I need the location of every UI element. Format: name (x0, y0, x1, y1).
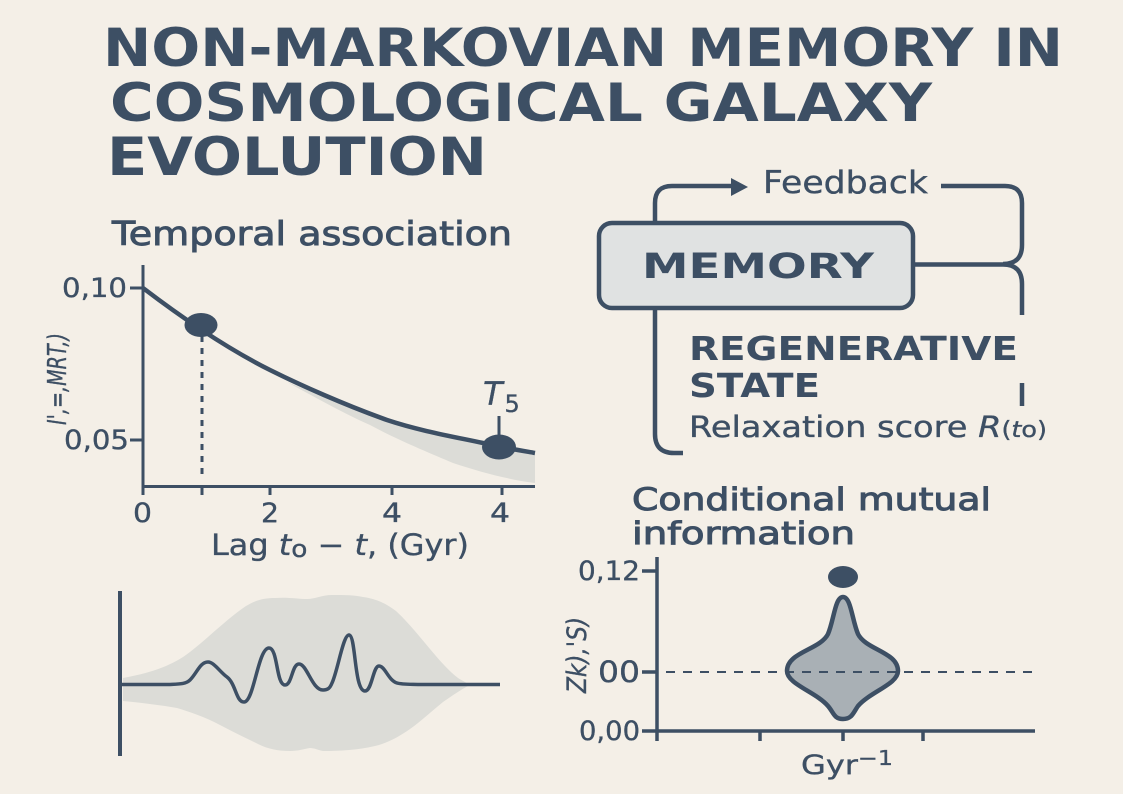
x axis label: t, (Gyr) (355, 528, 460, 562)
feedback loop connectors (655, 186, 1022, 453)
memory box (599, 223, 913, 308)
chart: temporal association line chart: 4 (490, 498, 510, 529)
diagram: memory feedback (599, 165, 1047, 453)
chart: signal with envelope (120, 591, 500, 756)
dashed marker line (200, 336, 204, 480)
x axis label: − (307, 528, 355, 562)
arrowhead (731, 178, 748, 196)
y axis label: Zk),'S) (562, 617, 593, 694)
regenerative state label (689, 329, 1018, 405)
chart: temporal association line chart: 2 (261, 498, 279, 529)
heading: conditional mutual information (632, 482, 991, 552)
chart: conditional mutual information violin (562, 556, 1037, 781)
title (103, 18, 1063, 188)
regenerative state label: STATE (689, 366, 820, 405)
regenerative state label: REGENERATIVE (689, 329, 1018, 368)
T5 data point (482, 434, 516, 460)
x axis label: Lag t (211, 528, 290, 562)
x axis label: −1 (858, 746, 893, 770)
title: NON-MARKOVIAN MEMORY IN (103, 18, 1063, 79)
heading: conditional mutual information: information (632, 516, 855, 552)
feedback label: Feedback (763, 165, 928, 201)
axes (130, 265, 535, 495)
outlier point (828, 566, 858, 588)
chart: temporal association line chart (43, 265, 535, 563)
chart: conditional mutual information violin: 00 (598, 655, 640, 689)
title: COSMOLOGICAL GALAXY (110, 73, 933, 134)
decay curve (143, 288, 535, 453)
dashed reference line (666, 671, 1037, 673)
relaxation score label: Relaxation score R(to) (689, 410, 1047, 444)
y axis label: I',=,MRT,) (43, 333, 73, 425)
T5 marker (498, 416, 500, 440)
heading: conditional mutual information: Conditional mutual (632, 482, 991, 518)
vertical axis (118, 591, 122, 756)
waveform (120, 635, 500, 702)
violin (787, 597, 898, 719)
title: EVOLUTION (107, 127, 487, 188)
memory label: MEMORY (642, 247, 875, 287)
x axis label: o (291, 535, 307, 563)
shaded band under curve (287, 382, 535, 483)
y tick labels: 0,10 (62, 273, 127, 304)
grey envelope (123, 595, 470, 751)
T5 label: 5 (505, 390, 520, 418)
heading: temporal association: Temporal association (111, 215, 512, 253)
chart: conditional mutual information violin: 0,00 (579, 716, 640, 747)
data point (184, 313, 218, 337)
axes (642, 557, 1035, 741)
x axis label: Gyr (801, 750, 849, 781)
chart: temporal association line chart: 4 (382, 498, 402, 529)
chart: temporal association line chart: 0,05 (64, 425, 129, 456)
x tick labels: 0 (133, 498, 152, 529)
T5 label: T (483, 375, 503, 413)
y tick labels: 0,12 (578, 556, 640, 587)
